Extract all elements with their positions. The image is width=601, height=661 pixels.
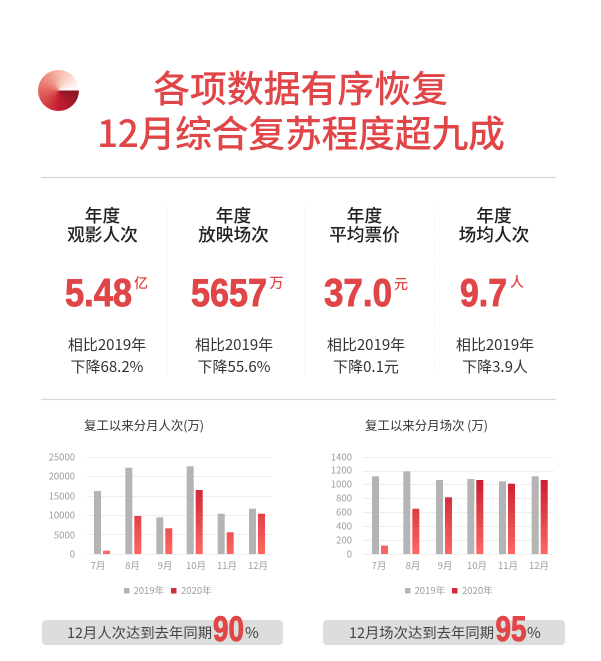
legend: 2020年 xyxy=(462,583,493,597)
callout: admissions 90% xyxy=(42,610,283,649)
callout: screenings 95%: 95 xyxy=(496,610,526,649)
panel: annual screenings: 万 xyxy=(270,273,284,293)
callout: admissions 90%: % xyxy=(245,622,259,643)
title: 12月综合复苏程度超九成 xyxy=(97,104,505,158)
title: 各项数据有序恢复 xyxy=(153,59,448,113)
callout: admissions 90%: 12月人次达到去年同期 xyxy=(67,622,212,643)
panel: annual admissions: 5.48 xyxy=(65,272,132,315)
title xyxy=(97,59,505,158)
panel: average attendance: 场均人次 xyxy=(459,221,530,247)
legend xyxy=(124,583,212,597)
panel: average ticket price: 下降0.1元 xyxy=(333,356,399,377)
bar chart: monthly admissions: 10000 xyxy=(49,508,75,522)
callout: screenings 95%: % xyxy=(527,622,541,643)
panel: annual screenings: 下降55.6% xyxy=(198,356,271,377)
bar chart: monthly admissions: 9月 xyxy=(158,558,172,572)
panel: annual admissions: 年度 xyxy=(85,202,120,228)
bar chart: monthly screenings: 400 xyxy=(336,518,352,532)
bar chart: monthly admissions: 11月 xyxy=(217,558,237,572)
icon: gradient pie circle xyxy=(38,70,79,111)
callout: screenings 95% xyxy=(323,610,565,649)
bar chart: monthly admissions: 25000 xyxy=(49,450,75,464)
bar chart: monthly screenings: 200 xyxy=(336,532,352,546)
callout: admissions 90%: 90 xyxy=(213,610,244,649)
legend: 2019年 xyxy=(414,583,446,597)
bar chart: monthly screenings xyxy=(331,415,554,597)
bar chart: monthly admissions: 10月 xyxy=(186,558,206,572)
panel: annual screenings: 年度 xyxy=(216,202,251,228)
callout: screenings 95%: 12月场次达到去年同期 xyxy=(349,622,494,643)
bar chart: monthly screenings: 0 xyxy=(347,546,352,560)
panel: average ticket price: 平均票价 xyxy=(329,221,400,247)
bar chart: monthly screenings: 12月 xyxy=(529,558,549,572)
panel: average ticket price: 元 xyxy=(394,274,408,294)
bar chart: monthly screenings: 600 xyxy=(336,504,352,518)
bar chart: monthly admissions: 7月 xyxy=(91,558,105,572)
chart title: monthly admissions: 复工以来分月人次(万) xyxy=(84,415,204,434)
bar chart: monthly screenings: 11月 xyxy=(498,558,518,572)
bar chart: monthly screenings: 7月 xyxy=(372,558,386,572)
bar chart: monthly screenings: 10月 xyxy=(467,558,487,572)
panel: annual admissions: 相比2019年 xyxy=(68,334,146,355)
bar chart: monthly screenings: 1200 xyxy=(331,462,352,476)
panel: average attendance: 相比2019年 xyxy=(456,334,534,355)
panel: annual screenings: 5657 xyxy=(191,272,267,315)
bar chart: monthly screenings: 9月 xyxy=(438,558,452,572)
bar chart: monthly screenings: 800 xyxy=(336,490,352,504)
bar chart: monthly admissions: 8月 xyxy=(125,558,140,572)
panel: annual admissions: 下降68.2% xyxy=(71,356,144,377)
bar chart: monthly admissions: 12月 xyxy=(248,558,268,572)
legend: 2020年 xyxy=(181,583,212,597)
panel: average attendance: 下降3.9人 xyxy=(462,356,528,377)
panel: average ticket price: 37.0 xyxy=(324,272,392,315)
panel: annual screenings xyxy=(191,202,284,377)
panel: average attendance: 年度 xyxy=(476,202,512,228)
panel: average attendance: 9.7 xyxy=(460,272,507,315)
panel: annual admissions: 亿 xyxy=(134,273,148,293)
panel: average attendance xyxy=(456,202,534,377)
bar chart: monthly admissions: 20000 xyxy=(49,468,75,482)
legend: 2019年 xyxy=(134,583,165,597)
bar chart: monthly admissions: 0 xyxy=(70,546,75,560)
bar chart: monthly screenings: 1000 xyxy=(331,476,352,490)
bar chart: monthly admissions: 15000 xyxy=(49,488,75,502)
panel: average ticket price: 年度 xyxy=(347,202,382,228)
legend xyxy=(405,583,493,597)
chart title: monthly screenings: 复工以来分月场次 (万) xyxy=(365,415,488,434)
panel: average attendance: 人 xyxy=(510,272,524,292)
panel: annual screenings: 放映场次 xyxy=(198,221,269,247)
panel: annual screenings: 相比2019年 xyxy=(195,334,273,355)
bar chart: monthly admissions: 5000 xyxy=(54,528,75,542)
panel: average ticket price xyxy=(324,202,408,377)
bar chart: monthly screenings: 8月 xyxy=(406,558,420,572)
panel: annual admissions: 观影人次 xyxy=(67,221,138,247)
bar chart: monthly screenings: 1400 xyxy=(331,450,352,464)
bar chart: monthly admissions xyxy=(49,415,272,597)
panel: annual admissions xyxy=(65,202,148,377)
panel: average ticket price: 相比2019年 xyxy=(327,334,405,355)
